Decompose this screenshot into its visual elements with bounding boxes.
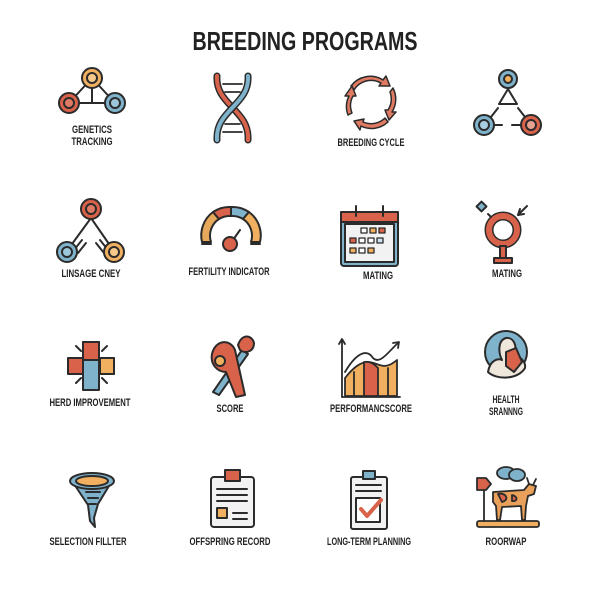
icon: breeding cycle [345,76,396,130]
label: roadmap: ROORWAP [486,536,526,548]
icon: dna [217,76,248,140]
icon: long-term planning [351,471,387,529]
label: health: HEALTH [492,394,520,406]
icon: fertility gauge [201,207,261,251]
icon: herd improvement [68,342,114,390]
label: selection: SELECTION FILLTER [50,536,127,548]
label: lineage: LINSAGE CNEY [62,268,121,280]
label: score: SCORE [216,403,244,415]
icon: genetics tracking [59,68,125,113]
label: genetics tracking: TRACKING [72,136,112,148]
label: offspring: OFFSPRING RECORD [190,536,271,548]
label: performance: PERFORMANCSCORE [330,403,412,415]
label: long-term: LONG-TERM PLANNING [327,536,411,548]
label: health: SRANNNG [489,406,523,418]
title: BREEDING PROGRAMS [192,26,418,56]
label: breeding cycle: BREEDING CYCLE [338,137,404,149]
icon: calendar [341,206,398,266]
label: fertility: FERTILITY INDICATOR [188,266,270,278]
label: herd: HERD IMPROVEMENT [50,397,131,409]
icon: triangle network [474,70,541,135]
icon: health screening [485,331,527,378]
icon: performance chart [339,339,400,397]
icon: score [212,336,254,397]
label: mating 2: MATING [492,268,522,280]
icon: lineage [57,199,124,262]
icon: selection filter [70,473,114,527]
label: genetics tracking: GENETICS [72,124,112,136]
icon: mating symbol [477,202,527,263]
icon: offspring record [211,470,254,527]
icon: cow roadmap [477,467,539,527]
label: mating 1: MATING [363,270,393,282]
